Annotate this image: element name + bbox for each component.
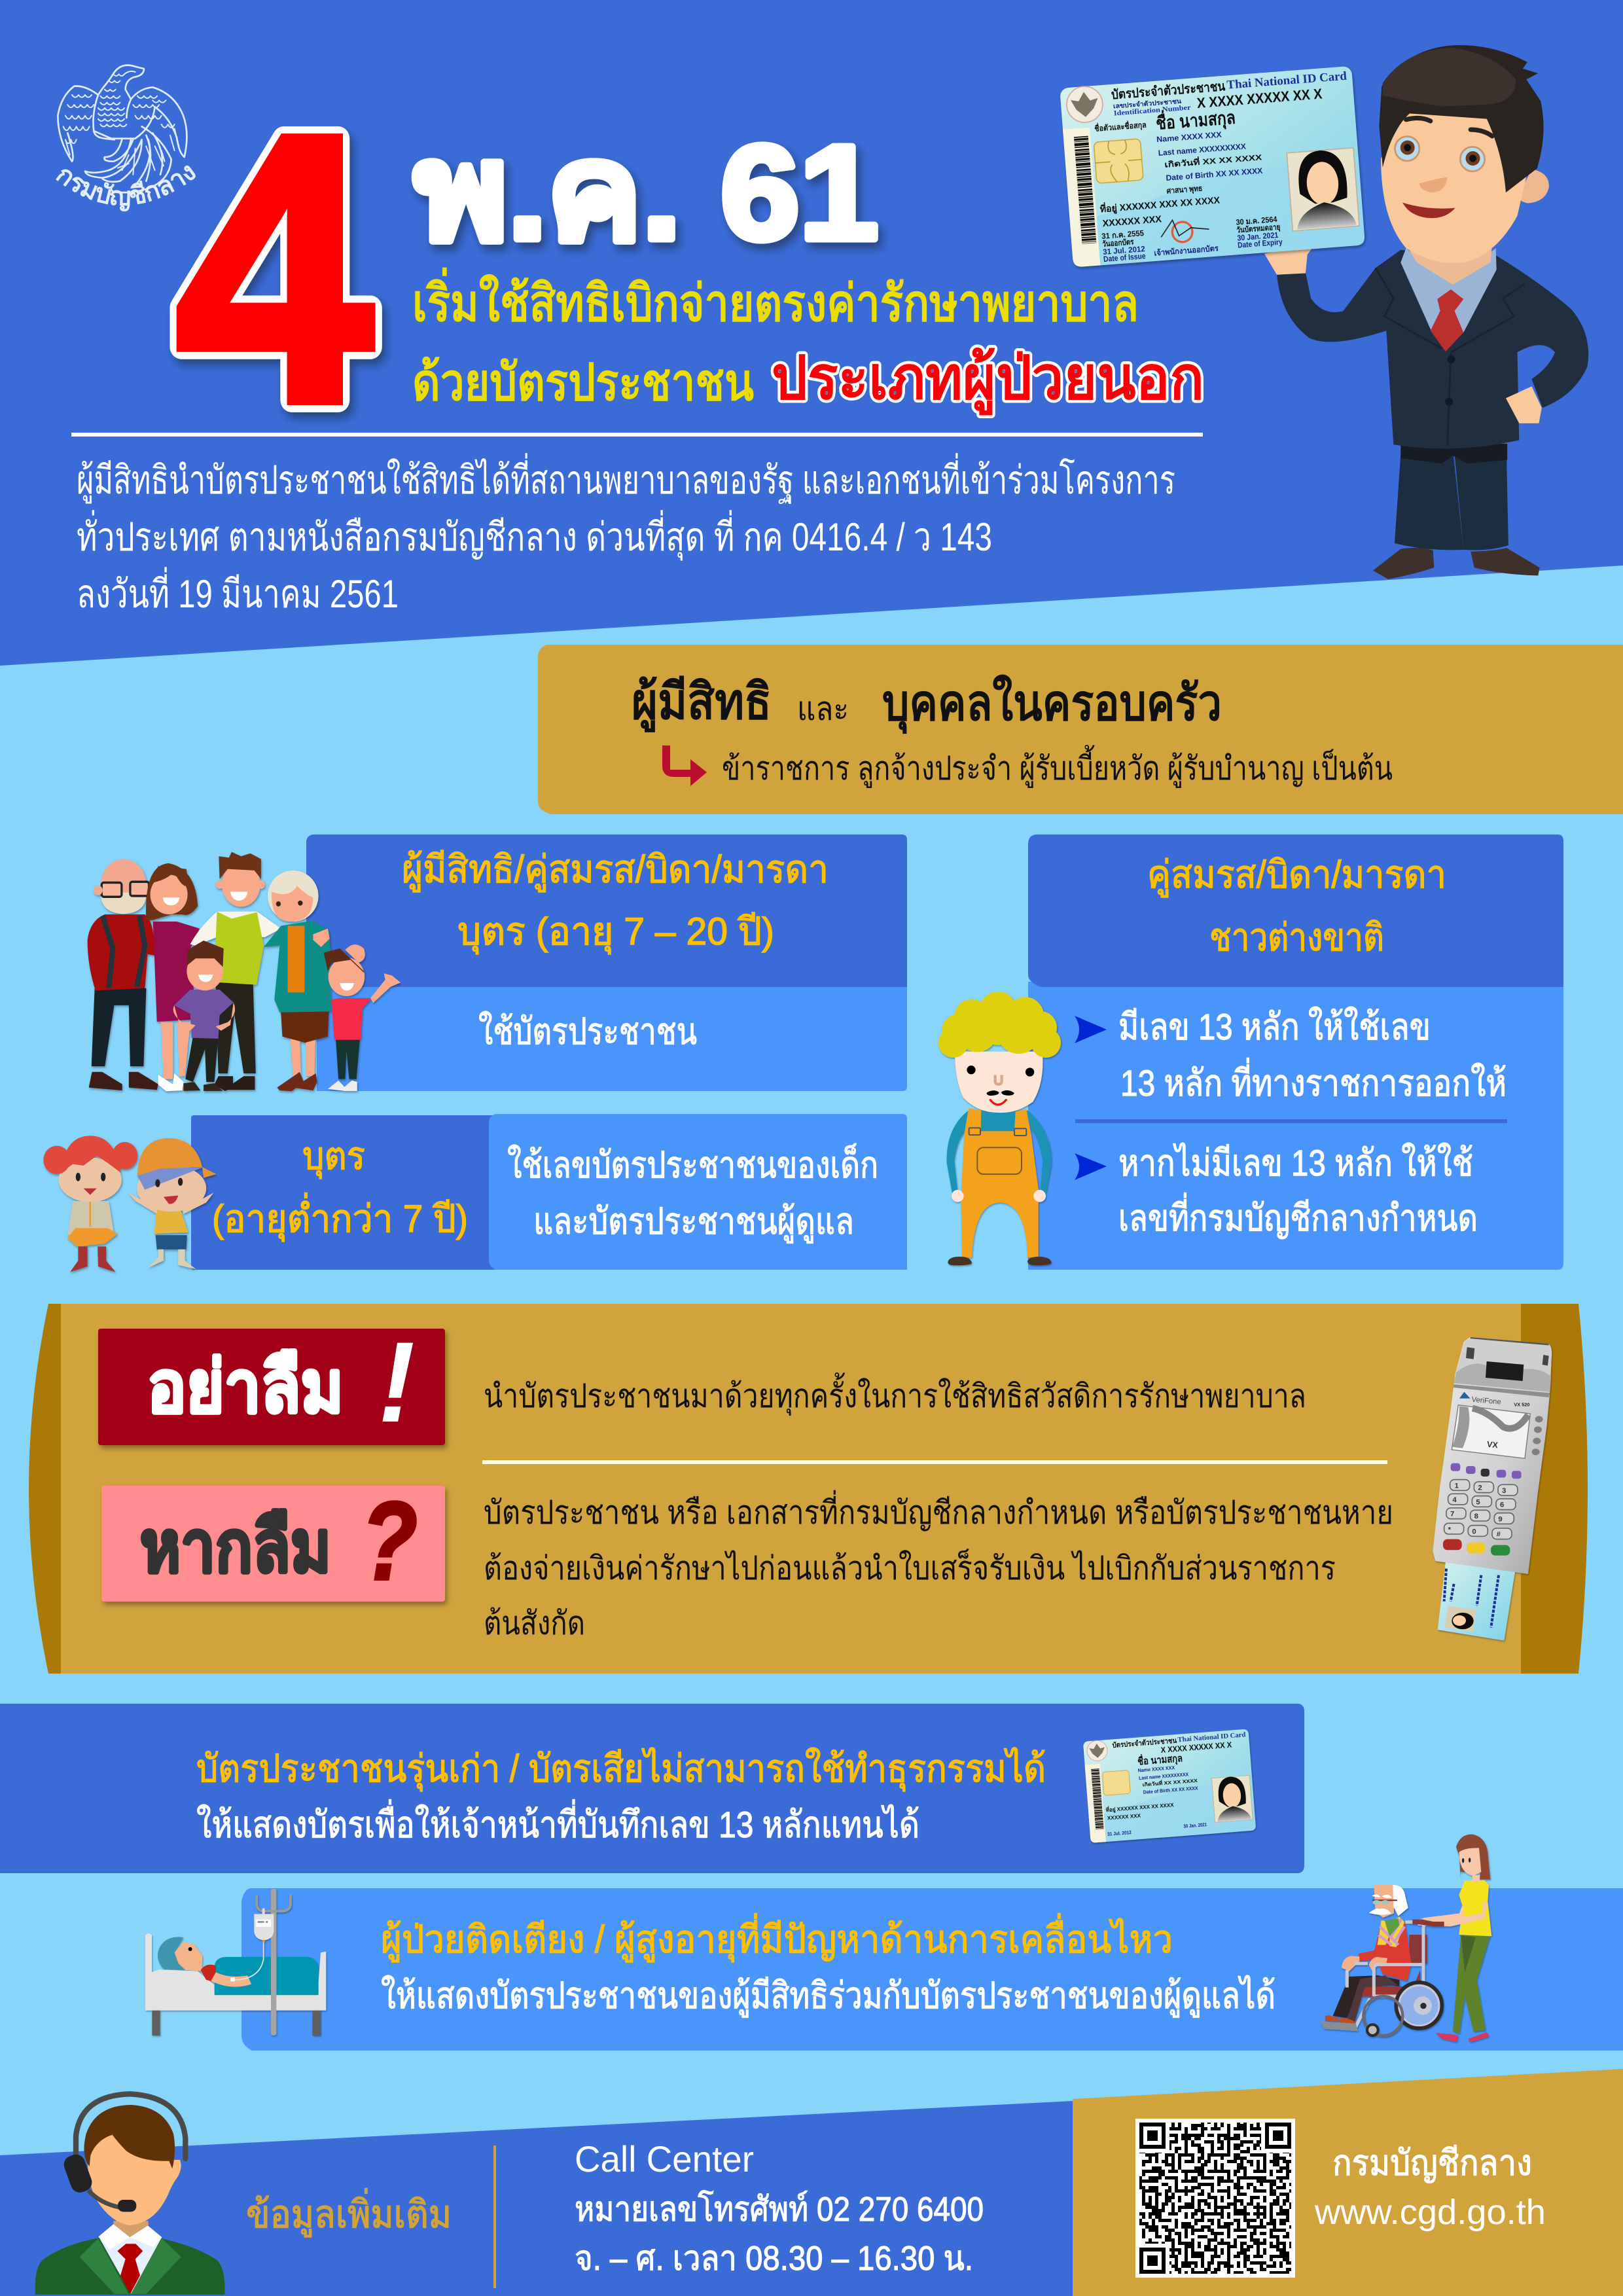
boy <box>128 1138 217 1269</box>
mouth <box>1402 202 1455 218</box>
illustration: card terminal: 8 <box>1474 1513 1478 1520</box>
department name and website: www.cgd.go.th <box>1314 2193 1546 2232</box>
ID card small: X XXXX XXXXX XX X <box>1160 1740 1232 1755</box>
ID card small: Thai National ID Card <box>1177 1731 1246 1744</box>
illustration: caregiver and wheelchair <box>1320 1835 1491 2042</box>
card fields: 31 Jul. 2012 <box>1103 244 1146 257</box>
face <box>955 1052 1043 1113</box>
panel: foreign family members: หากไม่มีเลข 13 หลัก ให้ใช้ <box>1118 1142 1473 1183</box>
grandmother <box>264 870 331 1091</box>
overalls <box>961 1108 1039 1258</box>
card heading: เลขประจำตัวประชาชน <box>1113 98 1182 111</box>
panel: old or damaged card: ให้แสดงบัตรเพื่อให้เจ้าหน้าที่บันทึกเลข 13 หลักแทนได้ <box>196 1799 919 1845</box>
panel: header background <box>0 0 1623 666</box>
illustration: card terminal: 9 <box>1498 1515 1503 1523</box>
ID card small: Date of Birth XX XX XXXX <box>1143 1785 1198 1795</box>
head <box>158 1937 202 1971</box>
call center text: จ. – ศ. เวลา 08.30 – 16.30 น. <box>575 2240 973 2278</box>
card fields: 30 ม.ค. 2564 <box>1236 215 1277 227</box>
man hands <box>1342 1956 1387 1971</box>
heading: family members: บุคคลในครอบครัว <box>882 674 1222 734</box>
subtitle line 1: เริ่มใช้สิทธิเบิกจ่ายตรงค่ารักษาพยาบาล <box>412 267 1139 332</box>
illustration: card terminal: VX 520 <box>1514 1401 1529 1407</box>
box: do not forget: อย่าลืม <box>147 1347 344 1427</box>
card fields: วันออกบัตร <box>1102 237 1134 249</box>
jacket <box>1277 250 1588 448</box>
card fields: 30 Jan. 2021 <box>1237 230 1279 243</box>
subtitle <box>412 267 1204 416</box>
face <box>88 2125 181 2225</box>
card fields: ศาสนา พุทธ <box>1166 184 1203 196</box>
panel: foreign family members: เลขที่กรมบัญชีกลางกำหนด <box>1118 1193 1478 1239</box>
panel: foreign family members: มีเลข 13 หลัก ให้ใช้เลข <box>1118 1006 1431 1047</box>
ear cup <box>62 2152 94 2195</box>
card heading: Identification Number <box>1113 103 1191 117</box>
ID card small: ที่อยู่ XXXXXX XXX XX XXXX <box>1105 1801 1175 1814</box>
wheelchair back <box>1409 1935 1427 1964</box>
illustration: card terminal: 3 <box>1502 1487 1506 1495</box>
lapels <box>80 2238 181 2294</box>
ID card small: เกิดวันที่ XX XX XXXX <box>1142 1776 1198 1787</box>
illustration: family <box>88 852 401 1091</box>
man body <box>1359 1922 1412 1981</box>
brand: VeriFone <box>1471 1396 1501 1407</box>
card fields <box>1092 101 1283 264</box>
ear <box>1519 169 1549 204</box>
illustration: card terminal: 7 <box>1450 1511 1454 1518</box>
heading lines: ผู้มีสิทธิ/คู่สมรส/บิดา/มารดา <box>402 848 829 892</box>
shoes <box>948 1257 1052 1265</box>
ID card small: บัตรประจำตัวประชาชน <box>1112 1736 1177 1749</box>
QR code <box>1135 2119 1295 2278</box>
heading: and: และ <box>797 691 849 727</box>
girl <box>43 1136 137 1272</box>
call center text: Call Center <box>575 2138 754 2179</box>
card fields: เจ้าพนักงานออกบัตร <box>1154 243 1219 258</box>
examples: ข้าราชการ ลูกจ้างประจำ ผู้รับเบี้ยหวัด ผู้รับบำนาญ เป็นต้น <box>722 745 1393 788</box>
neck <box>1406 245 1492 285</box>
ID card small: 31 Jul. 2012 <box>1107 1829 1132 1837</box>
card fields: Date of Birth XX XX XXXX <box>1166 166 1263 183</box>
tie <box>117 2244 143 2294</box>
ID card small: Name XXXX XXX <box>1137 1765 1175 1773</box>
caregiver arm <box>1418 1901 1488 1926</box>
card heading: บัตรประจำตัวประชาชน <box>1111 79 1226 102</box>
keys <box>1532 1416 1543 1455</box>
bed legs <box>152 2011 321 2036</box>
card heading <box>1111 69 1349 118</box>
illustration: card terminal: 4 <box>1452 1496 1457 1504</box>
department name and website: กรมบัญชีกลาง <box>1332 2144 1532 2183</box>
screen: VX <box>1486 1440 1499 1450</box>
panel: bedridden and mobility-impaired <box>241 1888 1623 2051</box>
if forgotten text <box>484 1490 1393 1641</box>
if forgotten text: บัตรประชาชน หรือ เอกสารที่กรมบัญชีกลางกำหนด หรือบัตรประชาชนหาย <box>484 1490 1393 1531</box>
illustration: card terminal: 6 <box>1500 1501 1504 1509</box>
card fields: เกิดวันที่ XX XX XXXX <box>1164 151 1262 170</box>
illustration: foreign man in overalls <box>938 992 1061 1265</box>
blanket <box>215 1957 319 1995</box>
card fields: Name XXXX XXX <box>1156 130 1222 144</box>
screen <box>1452 1405 1530 1458</box>
signature stamp <box>1171 221 1193 243</box>
man head <box>1369 1884 1408 1918</box>
arm and gown <box>201 1965 216 1982</box>
chip <box>1094 139 1143 183</box>
portrait <box>1287 148 1359 231</box>
card heading: Thai National ID Card <box>1226 69 1347 92</box>
card fields: วันบัตรหมดอายุ <box>1236 223 1281 236</box>
subtitle line 2: ด้วยบัตรประชาชน <box>412 353 754 411</box>
man legs <box>1333 1975 1399 2018</box>
illustration: card terminal: * <box>1448 1526 1452 1534</box>
icon: red turn arrow <box>662 745 707 786</box>
caregiver shoes <box>1436 2032 1489 2042</box>
card fields: ที่อยู่ XXXXXX XXX XX XXXX <box>1099 192 1221 215</box>
shirt <box>99 2224 162 2294</box>
panel: footer contact background <box>0 2101 1073 2296</box>
if forgotten text: ต้องจ่ายเงินค่ารักษาไปก่อนแล้วนำใบเสร็จรับเงิน ไปเบิกกับส่วนราชการ <box>484 1549 1336 1587</box>
hair <box>1379 45 1544 192</box>
box: if forgotten <box>101 1479 445 1604</box>
IV pole <box>257 1889 291 2036</box>
intro text block: ทั่วประเทศ ตามหนังสือกรมบัญชีกลาง ด่วนที่สุด ที่ กค 0416.4 / ว 143 <box>77 510 992 561</box>
card fields: Date of Issue <box>1103 251 1146 264</box>
panel: foreign family members: 13 หลัก ที่ทางราชการออกให้ <box>1120 1058 1507 1103</box>
card fields: Date of Expiry <box>1238 237 1283 250</box>
logo: Comptroller General's Department garuda <box>56 64 196 211</box>
facial features <box>967 1066 1034 1105</box>
card fields: XXXXXX XXX <box>1102 214 1162 229</box>
drip line <box>234 1942 264 1980</box>
panel: reminder <box>29 1304 1588 1674</box>
result: ใช้บัตรประชาชน <box>478 1011 697 1052</box>
box: do not forget: ! <box>378 1319 415 1446</box>
illustration: card terminal <box>1433 1337 1552 1641</box>
card fields: ชื่อตัวและชื่อสกุล <box>1094 119 1147 134</box>
boy right <box>324 944 401 1091</box>
illustration: card terminal: 1 <box>1455 1482 1459 1490</box>
seal <box>1065 85 1104 124</box>
illustration: call-center agent <box>35 2094 224 2295</box>
tie <box>1431 289 1463 351</box>
grandfather <box>88 859 165 1090</box>
shirt and collar <box>1400 248 1497 350</box>
department name and website <box>1314 2144 1546 2232</box>
caregiver head <box>1456 1835 1490 1882</box>
title date: พ.ค. 61 <box>414 118 878 268</box>
arrow 1 <box>1075 1016 1107 1043</box>
illustration: businessman holding ID card <box>1264 45 1588 579</box>
IV bag <box>254 1908 274 1942</box>
panel: child under 7: บุตร <box>302 1135 365 1179</box>
outpatient highlight: ประเภทผู้ป่วยนอก <box>772 345 1204 416</box>
panel: eligible persons banner <box>538 645 1623 814</box>
illustration: card terminal: 0 <box>1472 1528 1476 1535</box>
panel: foreign family members: คู่สมรส/บิดา/มารดา <box>1147 853 1446 897</box>
ID card small: ชื่อ นามสกุล <box>1137 1750 1183 1768</box>
card heading: X XXXX XXXXX XX X <box>1196 85 1323 111</box>
ID card small: Last name XXXXXXXXX <box>1139 1771 1188 1781</box>
panel: child under 7: (อายุต่ำกว่า 7 ปี) <box>212 1193 468 1242</box>
panel: eligible persons with ID card <box>306 834 907 1091</box>
box: if forgotten: ? <box>361 1479 418 1604</box>
caregiver trousers <box>1453 1935 1490 2034</box>
caregiver top <box>1459 1880 1491 1936</box>
call center text <box>575 2138 984 2278</box>
call center text: หมายเลขโทรศัพท์ 02 270 6400 <box>575 2190 984 2229</box>
ID card small: XXXXXX XXX <box>1107 1813 1141 1821</box>
eyes <box>1395 118 1492 171</box>
if forgotten text: ต้นสังกัด <box>484 1605 585 1641</box>
footrest <box>1320 2021 1358 2031</box>
raised hand <box>1264 238 1315 275</box>
panel: bedridden and mobility-impaired: ให้แสดงบัตรประชาชนของผู้มีสิทธิร่วมกับบัตรประชาชนของผู้ดูแลได้ <box>381 1975 1275 2018</box>
scarf <box>1378 1916 1404 1947</box>
panel: old or damaged card <box>0 1704 1304 1873</box>
box: if forgotten: หากลืม <box>140 1507 331 1587</box>
card fields: Last name XXXXXXXXX <box>1158 142 1246 158</box>
intro text block: ลงวันที่ 19 มีนาคม 2561 <box>77 567 399 616</box>
hip hand <box>1506 386 1542 423</box>
intro text block: ผู้มีสิทธินำบัตรประชาชนใช้สิทธิได้ที่สถานพยาบาลของรัฐ และเอกชนที่เข้าร่วมโครงการ <box>77 453 1175 504</box>
ID card small <box>1083 1729 1256 1843</box>
ID card large <box>1060 66 1365 267</box>
wheelchair frame <box>1347 1922 1442 2036</box>
boy centre <box>173 941 235 1091</box>
microphone <box>88 2191 120 2208</box>
arrow 2 <box>1075 1153 1107 1180</box>
hair <box>84 2105 175 2168</box>
panel: child under 7: ใช้เลขบัตรประชาชนของเด็ก <box>507 1143 878 1185</box>
headband <box>76 2094 185 2159</box>
mother <box>146 863 200 1091</box>
card fields: ชื่อ นามสกุล <box>1155 105 1236 135</box>
box: do not forget <box>98 1319 445 1446</box>
illustration: card terminal: 2 <box>1478 1484 1482 1492</box>
panel: foreign family members <box>1028 834 1563 1270</box>
barcode <box>1081 136 1089 243</box>
illustration: two children <box>43 1136 217 1272</box>
panel: footer department background <box>1073 2069 1623 2296</box>
illustration: card terminal: 5 <box>1476 1498 1480 1506</box>
panel: eligible persons with ID card: บุตร (อายุ 7 – 20 ปี) <box>457 910 774 955</box>
big number 4: 4 <box>176 56 374 480</box>
father <box>190 852 281 1091</box>
trousers <box>1373 444 1540 579</box>
heading: eligible persons: ผู้มีสิทธิ <box>632 674 772 732</box>
footer label: ข้อมูลเพิ่มเติม <box>246 2188 452 2237</box>
arms <box>947 1111 1052 1193</box>
neck <box>113 2221 149 2237</box>
curly hair <box>938 992 1061 1058</box>
panel: child under 7 <box>191 1114 907 1270</box>
face <box>1381 113 1528 263</box>
panel: foreign family members: ชาวต่างขาติ <box>1209 916 1384 959</box>
logo wordmark: กรมบัญชีกลาง <box>56 165 196 211</box>
inserted card <box>1438 1560 1515 1641</box>
nose <box>1419 177 1448 192</box>
jacket <box>35 2238 224 2295</box>
ID card small: 30 Jan. 2021 <box>1183 1821 1207 1829</box>
bed frame <box>145 1933 326 2011</box>
intro text block <box>77 453 1175 616</box>
panel: old or damaged card: บัตรประชาชนรุ่นเก่า / บัตรเสียไม่สามารถใช้ทำธุรกรรมได้ <box>196 1747 1046 1792</box>
panel: child under 7: และบัตรประชาชนผู้ดูแล <box>533 1200 854 1244</box>
reminder text: นำบัตรประชาชนมาด้วยทุกครั้งในการใช้สิทธิสวัสดิการรักษาพยาบาล <box>484 1372 1306 1416</box>
illustration: patient in hospital bed <box>145 1889 326 2036</box>
big number 4: 4 <box>176 56 374 480</box>
illustration: card terminal: # <box>1497 1531 1501 1539</box>
card fields: 31 ก.ค. 2555 <box>1101 228 1145 241</box>
panel: bedridden and mobility-impaired: ผู้ป่วยติดเตียง / ผู้สูงอายุที่มีปัญหาด้านการเคลื่อนไหว <box>381 1913 1173 1963</box>
